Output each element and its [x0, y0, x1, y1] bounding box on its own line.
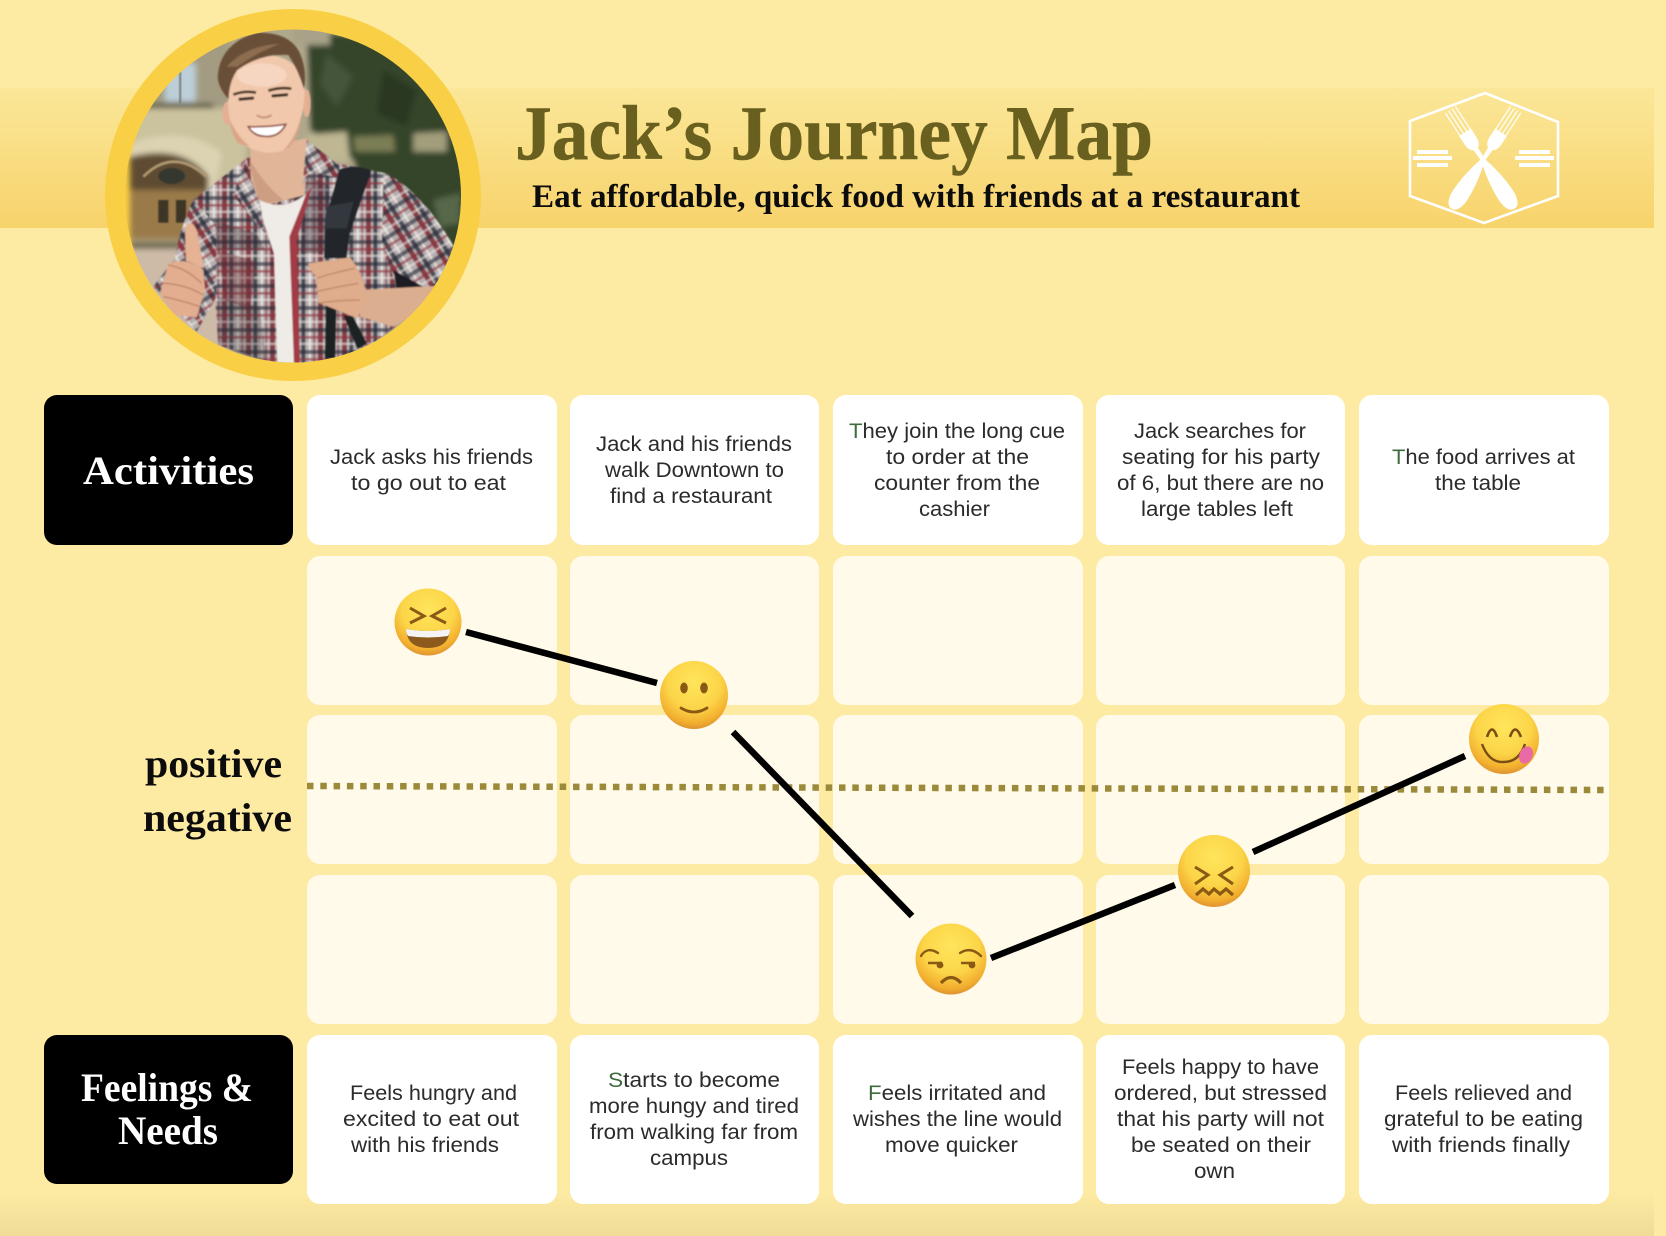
door arch details [143, 63, 207, 223]
thumbs-up hand [185, 223, 204, 268]
icon: crossed forks in hexagon [1410, 93, 1558, 223]
icon: unamused emoji [916, 924, 986, 994]
hair [218, 33, 305, 99]
panel: feelings row [307, 1035, 1609, 1204]
feeling card 4: be seated on their [1131, 1134, 1311, 1157]
feeling card 5: grateful to be eating [1384, 1108, 1583, 1131]
feeling card 3 [833, 1035, 1083, 1204]
activity card 2: find a restaurant [610, 485, 772, 508]
ears [222, 102, 232, 125]
activity card 3: They join the long cue [849, 420, 1065, 443]
feeling card 2: Starts to become [608, 1069, 780, 1092]
feeling card 1: with his friends [350, 1134, 499, 1157]
activity card 1: Jack asks his friends [330, 446, 533, 469]
nose [257, 115, 272, 117]
collar [303, 140, 340, 185]
journey line [466, 632, 1465, 958]
feeling card 2: more hungy and tired [589, 1095, 799, 1118]
row header: Feelings & Needs: Needs [118, 1108, 218, 1153]
header banner [0, 88, 1654, 228]
activity card 3: counter from the [874, 472, 1040, 495]
activity card 4: large tables left [1141, 498, 1293, 521]
icon: laughing emoji [394, 588, 462, 656]
feeling card 1 [307, 1035, 557, 1204]
feeling card 1: Feels hungry and [350, 1082, 517, 1105]
activity card 2: walk Downtown to [604, 459, 784, 482]
feeling card 3: wishes the line would [852, 1108, 1062, 1131]
row header: Activities: Activities [83, 448, 254, 493]
activity card 5: The food arrives at [1392, 446, 1575, 469]
activity card 1: to go out to eat [351, 472, 506, 495]
row header: Feelings & Needs [44, 1035, 293, 1184]
feeling card 4: ordered, but stressed [1114, 1082, 1327, 1105]
portrait: Jack in a circular frame [105, 9, 490, 381]
feeling card 3: Feels irritated and [868, 1082, 1046, 1105]
title: Jack’s Journey Map [515, 90, 1153, 176]
neutral dotted axis [307, 786, 1606, 790]
feeling card 2: campus [650, 1147, 728, 1170]
feeling card 4: own [1194, 1160, 1235, 1183]
bottom shading band [0, 1192, 1654, 1236]
label: positive: positive [145, 741, 282, 786]
feeling card 1: excited to eat out [343, 1108, 519, 1131]
face [228, 55, 305, 153]
row header: Activities [44, 395, 293, 545]
panel: activities row [307, 395, 1609, 545]
activity card 5: the table [1435, 472, 1521, 495]
activity card 1 [307, 395, 557, 545]
activity card 5 [1359, 395, 1609, 545]
white t-shirt [256, 194, 306, 363]
feeling card 5: with friends finally [1391, 1134, 1571, 1157]
feeling card 2 [570, 1035, 819, 1204]
activity card 4 [1096, 395, 1345, 545]
activity card 4: Jack searches for [1134, 420, 1306, 443]
feeling card 4: Feels happy to have [1122, 1056, 1319, 1079]
torso and sleeves [188, 149, 444, 362]
feeling card 5: Feels relieved and [1395, 1082, 1572, 1105]
arm and gripping hand [360, 286, 435, 327]
icon: confounded emoji [1178, 835, 1250, 907]
feeling card 5 [1359, 1035, 1609, 1204]
icon: yum emoji [1469, 704, 1539, 774]
feeling card 4: that his party will not [1117, 1108, 1324, 1131]
activity card 3: cashier [919, 498, 990, 521]
backpack strap [324, 167, 372, 258]
activity card 2: Jack and his friends [596, 433, 792, 456]
activity card 4: seating for his party [1122, 446, 1321, 469]
neck [250, 138, 307, 207]
feeling card 4 [1096, 1035, 1345, 1204]
subtitle: Eat affordable, quick food with friends at a restaurant [532, 179, 1300, 215]
brows and eyes [233, 88, 291, 95]
label: negative: negative [143, 795, 292, 840]
panel: emotion grid [307, 556, 1609, 1024]
smile [248, 124, 286, 136]
row header: Feelings & Needs: Feelings & [81, 1065, 253, 1110]
feeling card 2: from walking far from [590, 1121, 798, 1144]
activity card 4: of 6, but there are no [1117, 472, 1324, 495]
icon: smiling emoji [660, 661, 728, 729]
activity card 3: to order at the [886, 446, 1029, 469]
feeling card 3: move quicker [885, 1134, 1018, 1157]
activity card 3 [833, 395, 1083, 545]
activity card 2 [570, 395, 819, 545]
